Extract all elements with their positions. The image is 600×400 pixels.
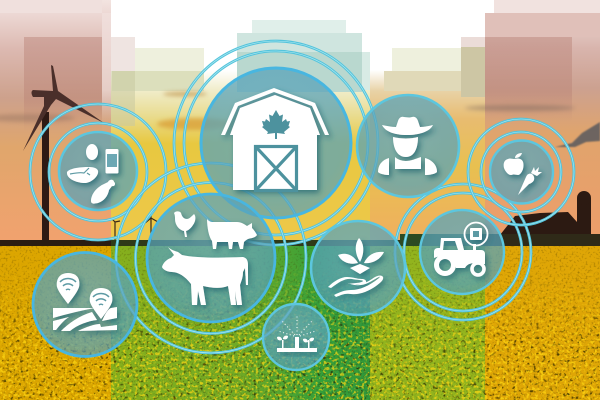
rings around the meat circle — [30, 104, 166, 240]
icon: location pins over fields — [53, 273, 117, 331]
icon: seedling over open hand — [328, 238, 384, 297]
panel: eggs, meat and preserves — [59, 132, 137, 210]
wifi signal marks — [60, 279, 109, 305]
icon: barn — [221, 88, 329, 190]
panel: livestock — [147, 194, 275, 322]
canola field — [0, 246, 600, 400]
distant small turbines — [112, 214, 158, 240]
icon: egg, jar, steak and drumstick — [67, 144, 118, 204]
panel: plant in hand — [311, 221, 405, 315]
panel: farmer — [357, 95, 459, 197]
jar label and steak bone — [70, 154, 117, 175]
barn door — [256, 146, 296, 190]
panel: irrigation — [263, 304, 329, 370]
chip centre — [473, 231, 479, 237]
icon: tractor with chip — [434, 222, 488, 275]
farm buildings silhouette — [500, 191, 591, 236]
icon: farmer with hat and overalls — [378, 117, 437, 175]
rings around the tractor circle — [395, 184, 531, 320]
cloud streaks — [0, 92, 600, 147]
rings around the livestock circle — [116, 163, 306, 353]
icon: apple and carrot — [504, 153, 542, 195]
panel: apple and carrot — [490, 140, 553, 204]
icon: sprinkler and seedlings — [277, 336, 317, 352]
icon: maple leaf — [262, 110, 290, 139]
horizon treeline — [0, 234, 600, 246]
icon: chicken, pig and cow — [162, 211, 257, 305]
water droplets — [278, 316, 316, 336]
sky background — [0, 0, 600, 245]
translucent blocks in the sky — [0, 0, 600, 132]
rings around the barn circle — [174, 41, 378, 245]
wind turbine — [23, 65, 104, 242]
panel: smart tractor — [420, 210, 504, 294]
panel: precision mapped fields — [33, 252, 137, 356]
rings around the produce circle — [468, 119, 574, 225]
panel: barn with maple leaf — [201, 68, 351, 218]
